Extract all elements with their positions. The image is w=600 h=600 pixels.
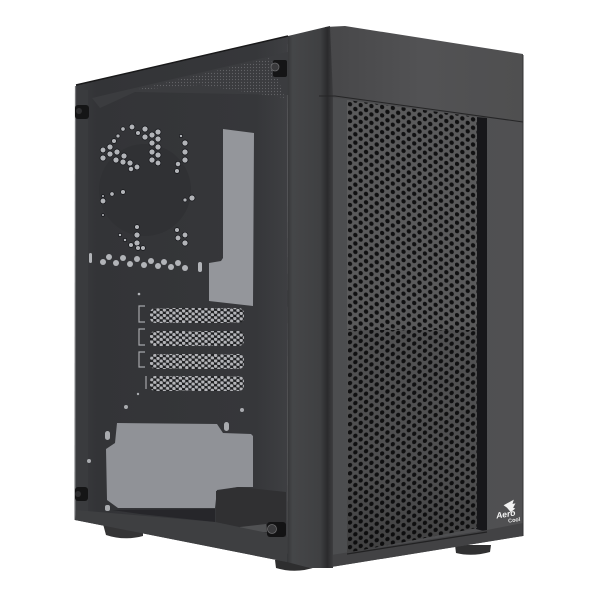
bottom seam <box>347 532 487 554</box>
logo word Cool: Cool <box>508 517 521 525</box>
panel: tempered glass side <box>75 36 288 562</box>
inner recess strip <box>476 117 487 532</box>
slot 1 <box>150 308 244 323</box>
dotted top vent <box>135 58 285 98</box>
mesh lower shading <box>347 300 477 553</box>
mesh lower <box>347 330 477 553</box>
screw top left <box>75 105 89 119</box>
glass bottom frame <box>75 510 287 562</box>
top band <box>320 26 523 122</box>
PSU bracket <box>216 487 286 537</box>
panel: front face <box>320 26 523 568</box>
inner plate shadow <box>78 90 88 515</box>
fan hole clusters <box>100 124 195 250</box>
screw top right <box>271 60 287 77</box>
right edge highlight <box>522 55 524 536</box>
hole row under fan <box>89 253 202 295</box>
glass left edge <box>74 86 76 520</box>
band seam <box>319 96 523 122</box>
slot 2 <box>150 331 244 346</box>
logo wing <box>503 499 517 513</box>
slot brackets <box>139 306 146 389</box>
bottom band <box>325 523 523 568</box>
top interior panel <box>92 52 288 108</box>
foot: left rear <box>103 524 143 538</box>
front body <box>325 92 523 568</box>
screw bottom right <box>267 522 286 537</box>
logo: Aerocool <box>493 499 521 527</box>
slot 4 <box>150 376 244 391</box>
bracket vent <box>240 524 267 533</box>
screw bottom left <box>75 487 88 501</box>
foot: centre <box>275 560 316 571</box>
PSU cutout <box>106 423 253 508</box>
panel: corner pillar <box>287 26 333 568</box>
glass top edge <box>76 36 288 85</box>
case floor shadow <box>112 509 215 522</box>
small mounting holes <box>87 393 244 511</box>
fan disc <box>99 144 191 236</box>
slot 3 <box>150 354 244 369</box>
expansion slots <box>139 306 244 391</box>
mesh upper <box>347 100 477 330</box>
foot: right <box>455 545 491 555</box>
motherboard tray cutout <box>209 129 254 306</box>
glass base <box>75 36 288 562</box>
logo word Aero: Aero <box>494 508 516 521</box>
